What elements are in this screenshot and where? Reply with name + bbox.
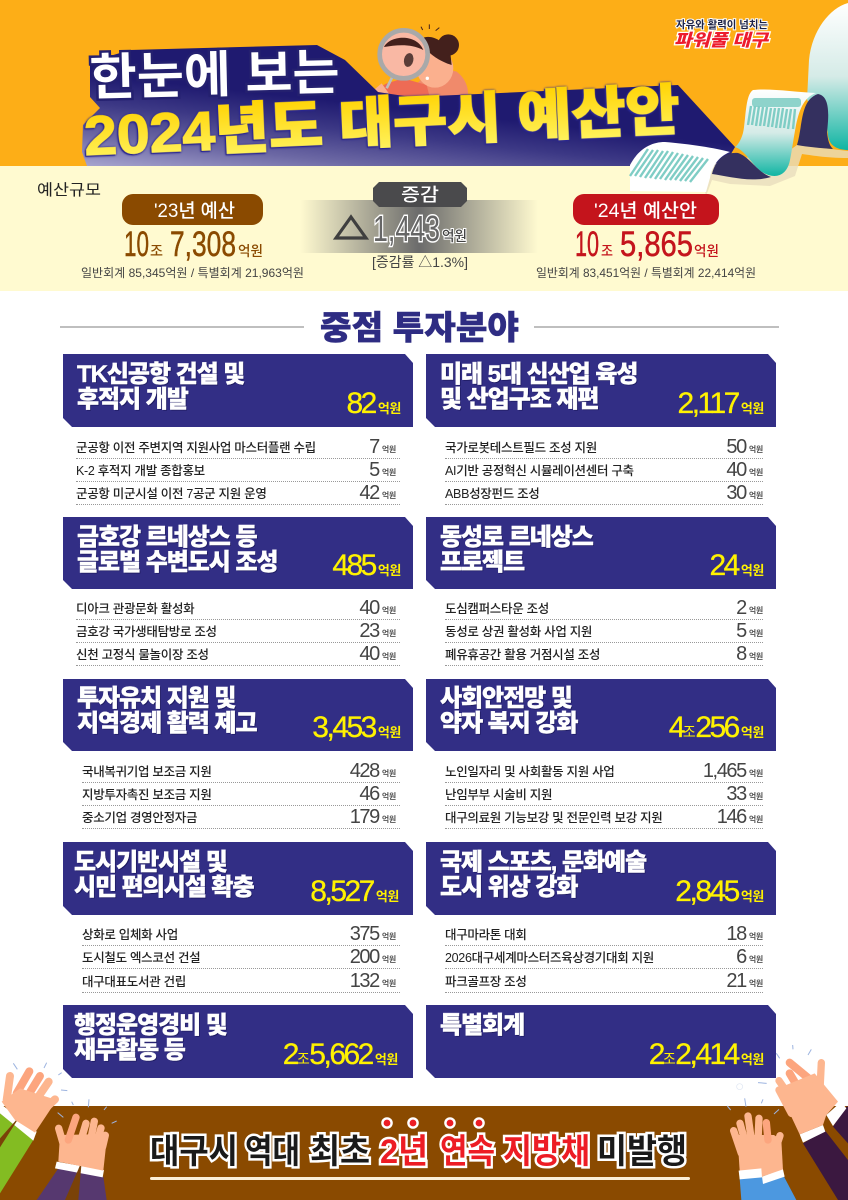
item: 40 억원 bbox=[726, 459, 763, 481]
amount: 2조2,414억원 bbox=[649, 1038, 764, 1071]
item: 5 억원 bbox=[736, 620, 763, 642]
item: 신천 고정식 물놀이장 조성 bbox=[76, 648, 209, 662]
amount: 2조5,662억원 bbox=[283, 1038, 398, 1071]
change block: 억원 bbox=[442, 228, 467, 244]
item bbox=[82, 760, 400, 783]
item: 23 억원 bbox=[359, 620, 396, 642]
panel: administrative expenses bbox=[63, 1005, 413, 1078]
footer message: 미발행 bbox=[597, 1133, 687, 1171]
illustration: clapping hands left bbox=[0, 1063, 117, 1200]
item bbox=[445, 482, 763, 505]
item: AI기반 공정혁신 시뮬레이션센터 구축 bbox=[445, 464, 634, 478]
item: 132 억원 bbox=[350, 970, 396, 992]
item: 도심캠퍼스타운 조성 bbox=[445, 602, 549, 616]
amount: 24억원 bbox=[710, 549, 764, 582]
city slogan logo bbox=[674, 18, 770, 50]
illustration: woman with magnifier bbox=[375, 24, 468, 105]
emphasis dots bbox=[382, 1118, 484, 1128]
heading: 특별회계 bbox=[440, 1012, 524, 1039]
city slogan logo: 파워풀 대구 bbox=[674, 31, 770, 50]
heading: 투자유치 지원 및 bbox=[77, 685, 235, 712]
item: 금호강 국가생태탐방로 조성 bbox=[76, 625, 217, 639]
item: 18 억원 bbox=[726, 923, 763, 945]
item: 대구대표도서관 건립 bbox=[82, 975, 186, 989]
heading: 재무활동 등 bbox=[74, 1037, 185, 1064]
illustration: budget paper scroll bbox=[630, 3, 848, 196]
item bbox=[445, 597, 763, 620]
item bbox=[445, 459, 763, 482]
item bbox=[445, 970, 763, 993]
item: 파크골프장 조성 bbox=[445, 975, 527, 989]
item bbox=[76, 436, 400, 459]
item: 8 억원 bbox=[736, 643, 763, 665]
heading: TK신공항 건설 및 bbox=[77, 361, 244, 388]
panel: social safety net bbox=[426, 679, 776, 829]
footer message bbox=[150, 1133, 687, 1171]
amount: 3,453억원 bbox=[312, 711, 401, 744]
heading bbox=[440, 361, 638, 413]
panel: international sports and culture bbox=[426, 842, 776, 993]
item: 대구의료원 기능보강 및 전문인력 보강 지원 bbox=[445, 811, 662, 825]
panel: TK new airport bbox=[63, 354, 413, 505]
panel: special account bbox=[426, 1005, 776, 1078]
heading: 후적지 개발 bbox=[77, 386, 188, 413]
2024 budget block bbox=[536, 194, 756, 280]
heading: 시민 편의시설 확충 bbox=[74, 874, 253, 901]
heading: 금호강 르네상스 등 bbox=[77, 524, 256, 551]
2023 budget block: 억원 bbox=[238, 243, 263, 259]
item bbox=[82, 923, 400, 946]
item bbox=[445, 806, 763, 829]
heading bbox=[440, 524, 594, 576]
amount: 485억원 bbox=[332, 549, 401, 582]
item: 40 억원 bbox=[359, 597, 396, 619]
item: 7 억원 bbox=[369, 436, 396, 458]
item bbox=[76, 482, 400, 505]
2024 budget block: 일반회계 83,451억원 / 특별회계 22,414억원 bbox=[536, 266, 756, 280]
footer message: 대구시 bbox=[150, 1133, 238, 1171]
item bbox=[445, 783, 763, 806]
item bbox=[82, 946, 400, 969]
item bbox=[76, 597, 400, 620]
heading: 및 산업구조 재편 bbox=[440, 386, 598, 413]
heading bbox=[77, 685, 258, 737]
item: 50 억원 bbox=[726, 436, 763, 458]
heading: 약자 복지 강화 bbox=[440, 710, 577, 737]
item: 군공항 이전 주변지역 지원사업 마스터플랜 수립 bbox=[76, 441, 316, 455]
item: 난임부부 시술비 지원 bbox=[445, 788, 552, 802]
change block: 증감 bbox=[401, 185, 439, 205]
panel: Dongseong-ro renaissance bbox=[426, 517, 776, 666]
panel: Geumho river renaissance bbox=[63, 517, 413, 666]
city slogan logo: 자유와 활력이 넘치는 bbox=[676, 18, 768, 31]
item bbox=[76, 643, 400, 666]
footer banner bbox=[0, 1045, 848, 1200]
2024 budget block: 억원 bbox=[694, 243, 719, 259]
footer message: 연속 bbox=[440, 1133, 495, 1171]
item: 6 억원 bbox=[736, 946, 763, 968]
item: 군공항 미군시설 이전 7공군 지원 운영 bbox=[76, 487, 267, 501]
2023 budget block: 10 bbox=[124, 225, 149, 264]
item: 대구마라톤 대회 bbox=[445, 928, 527, 942]
2023 budget block: 일반회계 85,345억원 / 특별회계 21,963억원 bbox=[81, 266, 304, 280]
heading bbox=[74, 1012, 228, 1064]
item: 146 억원 bbox=[717, 806, 763, 828]
change block bbox=[300, 182, 538, 270]
footer message: 역대 bbox=[245, 1133, 300, 1171]
item: ABB성장펀드 조성 bbox=[445, 487, 540, 501]
label: budget size: 예산규모 bbox=[37, 181, 101, 199]
heading: 행정운영경비 및 bbox=[74, 1012, 227, 1039]
2023 budget block: 조 bbox=[150, 243, 163, 259]
item bbox=[445, 946, 763, 969]
item: 179 억원 bbox=[350, 806, 396, 828]
item bbox=[445, 620, 763, 643]
item bbox=[76, 459, 400, 482]
change block: 1,443 bbox=[373, 208, 440, 249]
item: 동성로 상권 활성화 사업 지원 bbox=[445, 625, 592, 639]
2024 budget block: 조 bbox=[601, 243, 613, 259]
item: 1,465 억원 bbox=[703, 760, 763, 782]
item bbox=[82, 806, 400, 829]
illustration: clapping hands right bbox=[727, 1045, 848, 1200]
heading bbox=[440, 849, 648, 901]
heading: 국제 스포츠, 문화예술 bbox=[440, 849, 646, 876]
heading: 동성로 르네상스 bbox=[440, 524, 593, 551]
item: 42 억원 bbox=[359, 482, 396, 504]
item bbox=[82, 970, 400, 993]
heading: 미래 5대 신산업 육성 bbox=[440, 361, 637, 388]
2023 budget block bbox=[81, 194, 304, 280]
item bbox=[445, 923, 763, 946]
item: 200 억원 bbox=[350, 946, 396, 968]
item: 40 억원 bbox=[359, 643, 396, 665]
heading: 도시기반시설 및 bbox=[74, 849, 227, 876]
heading: 프로젝트 bbox=[440, 549, 524, 576]
item bbox=[76, 620, 400, 643]
panel: five future industries bbox=[426, 354, 776, 505]
2023 budget block: 7,308 bbox=[170, 225, 236, 264]
title line two: 2024년도 대구시 예산안 bbox=[83, 79, 681, 167]
heading bbox=[77, 361, 245, 413]
item: 5 억원 bbox=[369, 459, 396, 481]
panel: investment attraction bbox=[63, 679, 413, 829]
heading: 글로벌 수변도시 조성 bbox=[77, 549, 278, 576]
item: 33 억원 bbox=[726, 783, 763, 805]
amount: 2,845억원 bbox=[675, 875, 764, 908]
item: 2 억원 bbox=[736, 597, 763, 619]
2024 budget block: 5,865 bbox=[620, 225, 693, 264]
banner behind title bbox=[82, 45, 735, 166]
change block: [증감률 △1.3%] bbox=[372, 254, 468, 270]
item: 375 억원 bbox=[350, 923, 396, 945]
heading bbox=[440, 685, 579, 737]
panel: urban infrastructure bbox=[63, 842, 413, 993]
item: 지방투자촉진 보조금 지원 bbox=[82, 788, 212, 802]
item: 21 억원 bbox=[726, 970, 763, 992]
item: 상화로 입체화 사업 bbox=[82, 928, 178, 942]
item: 폐유휴공간 활용 거점시설 조성 bbox=[445, 648, 600, 662]
item: 국가로봇테스트필드 조성 지원 bbox=[445, 441, 597, 455]
heading bbox=[77, 524, 278, 576]
item: 중소기업 경영안정자금 bbox=[82, 811, 197, 825]
footer message: 2년 bbox=[380, 1133, 428, 1171]
footer message: 최초 bbox=[310, 1133, 370, 1171]
header and budget summary bbox=[0, 0, 848, 345]
footer message: 지방채 bbox=[503, 1133, 590, 1171]
item bbox=[445, 760, 763, 783]
2024 budget block: 10 bbox=[575, 225, 599, 264]
title line one: 한눈에 보는 bbox=[89, 44, 340, 106]
heading: 도시 위상 강화 bbox=[440, 874, 577, 901]
heading bbox=[74, 849, 255, 901]
item bbox=[445, 436, 763, 459]
item: 46 억원 bbox=[359, 783, 396, 805]
item bbox=[82, 783, 400, 806]
amount: 2,117억원 bbox=[678, 387, 764, 420]
item: 30 억원 bbox=[726, 482, 763, 504]
item bbox=[445, 643, 763, 666]
item: 국내복귀기업 보조금 지원 bbox=[82, 765, 212, 779]
item: 도시철도 엑스코선 건설 bbox=[82, 951, 200, 965]
item: 2026대구세계마스터즈육상경기대회 지원 bbox=[445, 951, 654, 965]
amount: 82억원 bbox=[346, 387, 401, 420]
amount: 8,527억원 bbox=[310, 875, 399, 908]
heading: 사회안전망 및 bbox=[440, 685, 572, 712]
2024 budget block: '24년 예산안 bbox=[594, 200, 697, 222]
item: 디아크 관광문화 활성화 bbox=[76, 602, 194, 616]
item: 428 억원 bbox=[350, 760, 396, 782]
item: K-2 후적지 개발 종합홍보 bbox=[76, 464, 205, 478]
2023 budget block: '23년 예산 bbox=[154, 200, 235, 222]
item: 노인일자리 및 사회활동 지원 사업 bbox=[445, 765, 614, 779]
heading: 지역경제 활력 제고 bbox=[77, 710, 256, 737]
section heading: 중점 투자분야 bbox=[320, 309, 519, 345]
amount: 4조256억원 bbox=[669, 711, 764, 744]
